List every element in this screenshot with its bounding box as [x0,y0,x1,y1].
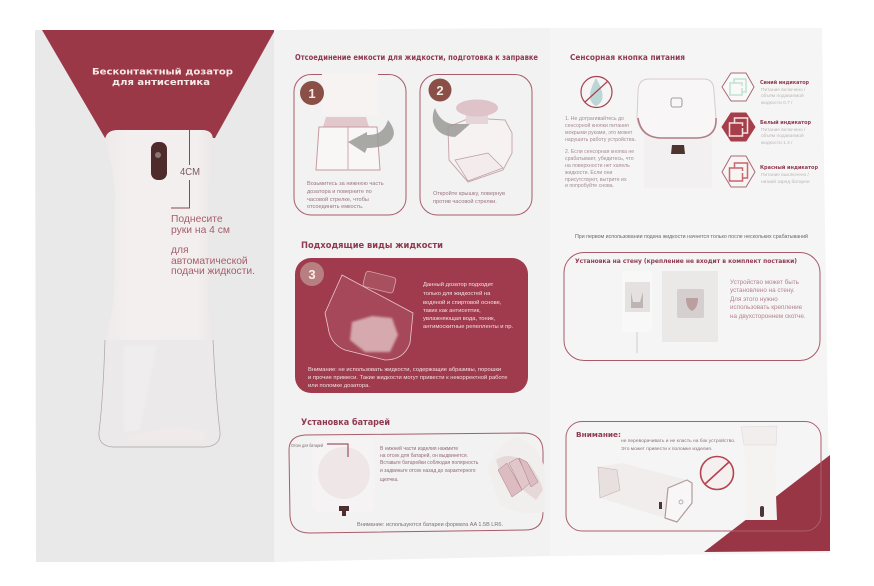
wall mount text: использовать крепление [730,304,803,311]
mount image B [662,271,718,342]
icon: prohibited [700,456,734,490]
blue indicator: Синий индикатор [760,79,810,86]
step 2 text: Откройте крышку, повернув [433,190,505,197]
standing dispenser [741,426,777,520]
title: для антисептика [112,78,210,88]
step 2 text: против часовой стрелки. [433,198,497,205]
banner: red trapezoid [42,30,275,138]
dispenser on side [598,463,692,522]
heading: liquids: Подходящие виды жидкости [301,241,443,251]
step 1 text: отсоединить емкость. [307,204,364,210]
battery text: на отсек для батарей, он выдвинется. [380,452,468,459]
distance callout [171,130,255,277]
white indicator: объём подаваемой [761,132,804,139]
touch button notes: 2. Если сенсорная кнопка не [565,149,634,155]
step 1 text: Возьмитесь за нижнюю часть [307,181,384,187]
step 1 text: часовой стрелке, чтобы [307,196,369,203]
battery text: В нижней части изделия нажмите [380,445,458,452]
white indicator: Белый индикатор [760,119,812,126]
liquids text: только для жидкостей на [423,290,491,297]
blue indicator: объём подаваемой [761,92,804,99]
liquids text: водяной и спиртовой основе, [423,299,502,306]
liquid splash [350,316,398,352]
distance callout: подачи жидкости. [171,266,255,277]
red indicator: низкий заряд батареи [761,178,810,185]
number 3: 3 [308,267,316,282]
wall mount heading: Установка на стену (крепление не входит в комплект поставки) [575,258,797,265]
touch button notes: мокрыми руками, это может [565,130,633,136]
white indicator: Питание включено / [761,127,806,133]
liquids warning: или поломке дозатора. [308,383,370,389]
number 2: 2 [436,83,444,98]
icon: no water [581,76,612,108]
wall mount text: Устройство может быть [730,278,800,286]
touch button notes: сенсорной кнопки питания [565,122,629,129]
indicators [722,73,819,187]
battery text: и задвиньте отсек назад до характерного [380,468,476,474]
first use note: При первом использовании подача жидкости начнется только после нескольких срабатываний [575,233,808,240]
battery note: Внимание: используются батареи формата AA 1.5В LR6. [357,522,503,528]
title [92,68,233,88]
battery label: Отсек для батарей [291,442,323,448]
battery text: щелчка. [380,477,399,483]
wall mount text: Для этого нужно [730,296,778,303]
wall mount text: на двухстороннем скотче. [730,313,806,320]
liquids warning: Внимание: не использовать жидкости, содержащие абразивы, порошки [308,367,501,373]
red indicator [722,156,819,187]
touch button notes: на поверхности нет капель [565,163,630,169]
wall mount card [564,252,820,360]
warning text: не переворачивать и не класть на бок устройство. [621,437,735,444]
panel: left page [35,30,275,562]
title: Бесконтактный дозатор [92,68,233,78]
touch button notes: и попробуйте снова. [565,182,614,189]
touch button notes: жидкости. Если они [565,170,612,176]
step 2 card [420,74,532,215]
distance callout: руки на 4 см [171,225,230,236]
touch button notes: 1. Не дотрагивайтесь до [565,115,624,122]
battery text: Вставьте батарейки соблюдая полярность [380,459,479,466]
arrow: turn left [348,120,394,153]
touch button notes: нарушить работу устройства. [565,136,636,143]
distance callout: автоматической [171,256,248,267]
heading: detach: Отсоединение емкости для жидкости, подготовка к заправке [295,53,538,62]
mount image A [622,271,652,353]
number 1: 1 [308,86,316,101]
step 1 text: дозатора и поверните по [307,189,372,195]
red indicator: Питание выключено / [761,172,810,178]
liquids text: увлажняющая вода, тоник, [423,316,495,322]
number 2 [428,78,452,102]
step 3 card [295,258,528,393]
heading: touch button: Сенсорная кнопка питания [570,53,685,62]
distance callout: 4CM [180,166,200,178]
liquids text: таких как антисептик, [423,308,481,314]
blue indicator [722,73,810,106]
panel: centre page [274,28,550,562]
white indicator: жидкости 1.4 г [761,140,793,146]
arrow: turn lid [433,108,470,137]
liquids text: антимоскитные репелленты и пр. [423,324,514,330]
dispenser top view [637,79,716,188]
blue indicator: жидкости 0.7 г [761,100,793,106]
liquids text: Данный дозатор подходит [423,281,494,288]
step 1 card [294,74,406,215]
number 1 [300,81,324,105]
panel: right page [550,28,830,556]
distance callout: для [171,245,189,256]
touch button notes: срабатывает, убедитесь, что [565,156,634,162]
wall mount text: установлено на стену. [730,287,795,294]
warning heading: Внимание: [576,430,621,439]
touch button notes: присутствуют, вытрите их [565,177,627,183]
heading: batteries: Установка батарей [301,417,390,428]
battery card [289,433,545,533]
warning text: Это может привести к поломке изделия. [621,446,712,452]
blue indicator: Питание включено / [761,87,806,93]
dispenser product image [99,130,220,447]
battery compartment image [488,437,545,513]
distance callout: Поднесите [171,214,223,225]
corner triangle [704,455,830,552]
warning card [566,422,821,531]
liquids warning: и прочие примеси. Такие жидкости могут привести к некорректной работе [308,374,507,381]
number 3 [300,262,324,286]
red indicator: Красный индикатор [760,164,819,171]
white indicator [722,113,812,146]
